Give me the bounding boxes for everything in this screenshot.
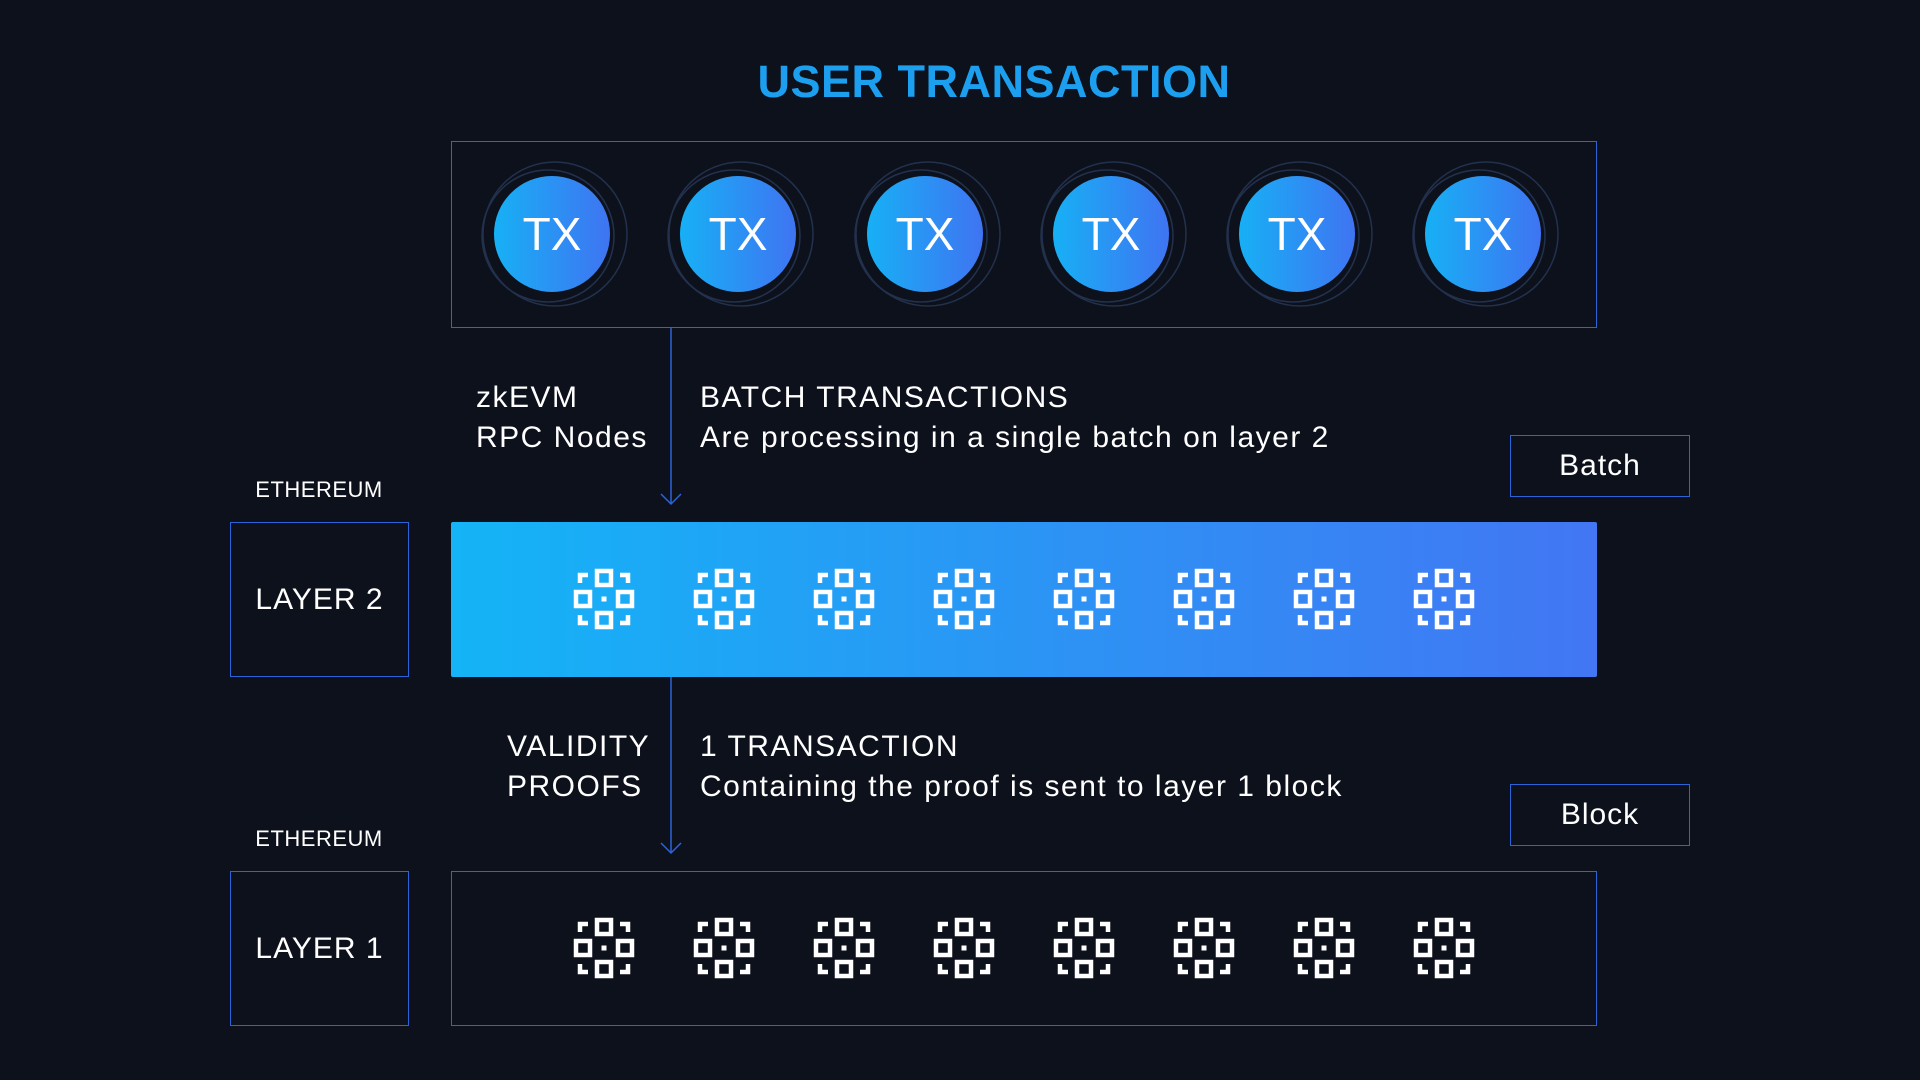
text: batch transactions: [700, 381, 1330, 454]
layer 1 box: [230, 871, 409, 1026]
tx circles: TX: [522, 208, 581, 260]
text: batch transactions: BATCH TRANSACTIONS: [700, 381, 1069, 414]
panel: user transactions: [451, 141, 1597, 328]
label: Batch: [1510, 435, 1690, 497]
title: USER TRANSACTION: [757, 56, 1230, 107]
ethereum label 1: ETHEREUM: [255, 826, 383, 851]
text: zkEVM RPC Nodes: zkEVM: [476, 381, 579, 414]
tx circles: TX: [1453, 208, 1512, 260]
panel: layer 2 batch bar: [451, 522, 1597, 677]
tx circles: [482, 162, 1558, 306]
text: 1 transaction: Containing the proof is sent to layer 1 block: [700, 770, 1343, 803]
text: validity proofs: VALIDITY: [507, 730, 650, 763]
layer 1 box: LAYER 1: [255, 932, 384, 964]
label: Block: [1510, 784, 1690, 846]
text: 1 transaction: 1 TRANSACTION: [700, 730, 959, 763]
tx circles: TX: [895, 208, 954, 260]
text: validity proofs: [507, 730, 650, 803]
text: zkEVM RPC Nodes: [476, 381, 648, 454]
label: Batch: Batch: [1559, 449, 1641, 482]
label: Block: Block: [1561, 798, 1639, 831]
layer 2 box: [230, 522, 409, 677]
text: zkEVM RPC Nodes: RPC Nodes: [476, 421, 648, 454]
tx circles: TX: [708, 208, 767, 260]
tx circles: TX: [1267, 208, 1326, 260]
ethereum label 2: ETHEREUM: [255, 477, 383, 502]
layer 2 box: LAYER 2: [255, 582, 384, 616]
text: 1 transaction: [700, 730, 1343, 803]
text: validity proofs: PROOFS: [507, 770, 643, 803]
arrow: to layer 1: [660, 677, 682, 854]
arrow: to layer 2: [660, 328, 682, 505]
tx circles: TX: [1081, 208, 1140, 260]
panel: layer 1 block: [451, 871, 1597, 1026]
text: batch transactions: Are processing in a single batch on layer 2: [700, 421, 1330, 454]
